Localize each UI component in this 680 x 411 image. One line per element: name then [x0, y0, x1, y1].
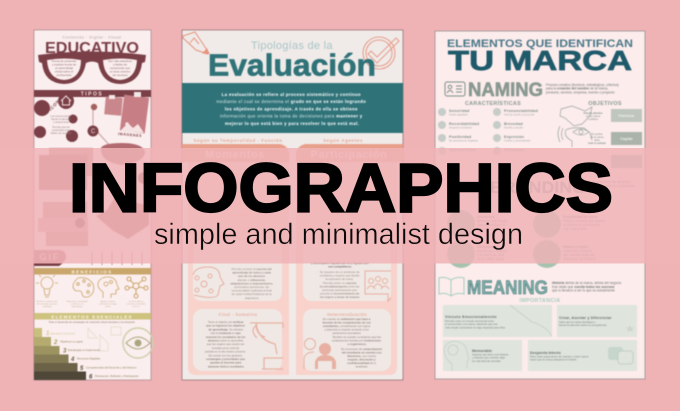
- heading: tu marca: TU MARCA: [448, 45, 632, 76]
- benefit texts: e interés en el: [70, 302, 84, 306]
- button: captar: [611, 132, 642, 145]
- pill: gif: [34, 250, 66, 266]
- step labels: 3: [63, 348, 67, 354]
- characteristics list: Recordabilidad: [449, 122, 480, 126]
- card: final sumativa: tras la instancia en que: [211, 331, 241, 335]
- meaning description: Historia detrás de la marca, detrás del negocio: [552, 281, 621, 285]
- step labels: Competencias del Docente y del Alumno: [86, 366, 137, 370]
- card: heteroevaluacion: confidencialidad de lo: [347, 361, 376, 365]
- step labels: 6: [89, 374, 93, 380]
- benefit texts: Ayuda a retener: [101, 300, 116, 303]
- timeline nodes: [88, 104, 112, 148]
- card: crear asentar diferenciar: Hace que la marca destaque y: [559, 320, 596, 324]
- title: educativo: EDUCATIVO: [45, 40, 139, 57]
- pill: gif: GIF: [40, 252, 60, 262]
- glasses right lens text: sin recursos: [112, 73, 128, 77]
- objective text: captar: todo lo activan: [588, 142, 606, 145]
- card: coevaluacion: la retroalimentación entre las: [320, 284, 359, 288]
- heading: importancia: IMPORTANCIA: [520, 298, 560, 304]
- card: heteroevaluacion: Es cuando se realización que hace a: [323, 317, 370, 321]
- card: formativa: [193, 240, 282, 301]
- branding items: todos los canales: [477, 227, 502, 231]
- glasses right lens text: Son más atractivos: [108, 59, 132, 63]
- card: heteroevaluacion: del estudiante en reunión con: [342, 350, 382, 354]
- characteristics list: Brevedad: [504, 122, 523, 126]
- band: beneficios: BENEFICIOS: [71, 269, 113, 274]
- heading: naming: NAMING: [468, 80, 543, 101]
- card: despierta interes: Despierta Interés: [530, 351, 561, 355]
- card: final sumativa: que les sugiere que puede ser: [207, 342, 244, 346]
- card: memorable: es más fácil de recordar: [472, 359, 501, 363]
- card: crear asentar diferenciar: [557, 305, 637, 337]
- panel: teal description: información que orienta la toma de decisiones para mantener y: [220, 114, 363, 119]
- branding items: Diferenciación: [477, 245, 499, 249]
- card: heteroevaluacion: directores, con mucho: [347, 354, 376, 358]
- glasses left lens text: profesorado: [57, 73, 72, 77]
- label: caracteristicas: CARACTERÍSTICAS: [465, 99, 521, 107]
- card: final sumativa: Final - Sumativa: [219, 312, 258, 317]
- benefit texts: Estimula la creatividad: [67, 300, 88, 303]
- panel: teal description: los objetivos de aprendizaje. A través de ella se obtiene: [225, 106, 358, 111]
- card: vinculo emocionalmente: el consumidor y la marca, haciendo que ese: [445, 322, 498, 326]
- bubble: mapa mental: [101, 143, 145, 165]
- subtitle: contenido digital visual: Contenido · Digital · Visual: [63, 36, 121, 40]
- card: coevaluacion: [303, 240, 391, 301]
- branding items: Valores y misión: [563, 245, 588, 249]
- card: despierta interes: Para crear seguimiento de marcas y crear marca: [530, 354, 589, 358]
- icon text: y reducir texto: [53, 121, 69, 124]
- button: captar: Captar: [620, 136, 633, 141]
- card: coevaluacion: la expresión de todos.: [325, 277, 354, 281]
- branding items: Rasgos humanos que definen: [563, 219, 606, 223]
- heading: tipologias de la: Tipologías de la: [251, 40, 333, 52]
- card: final sumativa: muestra los resultados de los: [206, 335, 246, 339]
- card: coevaluacion: y desempeño logrado por él y logrado por: [311, 261, 370, 265]
- branding items: de su mismo sector: [477, 257, 506, 261]
- step labels: 1: [46, 331, 50, 337]
- card: heteroevaluacion: u organismos.: [347, 342, 367, 346]
- card: heteroevaluacion: y aspectos a mejorar tomando a los: [324, 328, 369, 332]
- naming description: Proceso creativo (técnicos, estratégicos, criterios): [546, 83, 619, 87]
- step labels: Objetivos a Lograr: [60, 340, 83, 344]
- branding items: clara y constante en: [477, 223, 506, 227]
- column: participacion: [296, 144, 403, 375]
- icon: house circle: [58, 93, 74, 109]
- card: vinculo emocionalmente: más simple conectarse en algo especial para ellos: [445, 325, 506, 329]
- faint card text: Autoevaluación: [338, 172, 359, 176]
- benefit texts: complejos: [42, 306, 52, 308]
- card: final sumativa: ayudan al docente para: [210, 361, 242, 365]
- icon: small circles: [34, 114, 78, 142]
- card: crear asentar diferenciar: llamar la atención sobre la competencia: [559, 323, 607, 327]
- icon text: llamar la atención: [51, 118, 71, 121]
- icon: palette: [73, 278, 94, 297]
- button: hidden: [611, 155, 642, 168]
- faint mid boxes: [38, 148, 150, 246]
- figures row: [92, 252, 142, 265]
- card: formativa: aprendizaje de todos y cada: [232, 271, 271, 275]
- panel: elementos de marca: [435, 31, 645, 379]
- card: crear asentar diferenciar: Crear, Asentar y Diferenciar: [559, 316, 612, 320]
- icon: trophy: [250, 323, 283, 369]
- card: heteroevaluacion: respeto, discreción y: [348, 358, 376, 362]
- branding items: decisiones de la marca: [563, 257, 596, 261]
- label: objetivos: OBJETIVOS: [588, 101, 622, 107]
- card: coevaluacion: confianza y respeto que facilite: [320, 274, 360, 278]
- icon: meeting bubble: [365, 271, 391, 301]
- card: final sumativa: partida en el año lectivo próximo.: [205, 350, 246, 354]
- icon: people with book: [304, 338, 336, 369]
- icon: light bulb: [36, 275, 58, 297]
- title: infographics: INFOGRAPHICS: [69, 150, 613, 226]
- card: final sumativa: de aprendizaje. Se efectúa: [208, 327, 243, 331]
- card: coevaluacion: personas participantes que: [322, 288, 357, 292]
- icon: head: [98, 277, 119, 298]
- step labels: Estrategias a Implementar: [68, 348, 101, 352]
- card: final sumativa: Tiene el objetivo de verificar: [208, 320, 244, 324]
- branding items: Personalidad de marca: [563, 215, 598, 219]
- objective text: fidelizar: Vínculo afectivo: [583, 112, 603, 115]
- icon text: Permite que los: [52, 126, 70, 129]
- panel: teal description: La evaluación se refiere al proceso sistemático y continuo: [222, 92, 361, 97]
- card: coevaluacion: permite el reconocimiento de: [320, 292, 359, 296]
- step labels: 5: [80, 366, 84, 372]
- decor sheets: [88, 327, 121, 351]
- card: final sumativa: alcanzar dichos resultados: [208, 364, 244, 368]
- card: final sumativa: Sin contar con los gestores,: [208, 353, 243, 357]
- characteristics list: Expresión: [504, 135, 525, 139]
- band: elementos esenciales: [34, 313, 151, 320]
- label: agentes: Según Agentes: [323, 138, 363, 143]
- naming description: producto, servicio, empresa, evento o proyecto: [546, 90, 615, 94]
- card: formativa: asignatura.: [245, 296, 259, 300]
- icon: pencil: [183, 32, 209, 54]
- step labels: Recursos Digitales: [77, 356, 101, 360]
- characteristics list: Sin asociaciones negativas: [449, 140, 479, 142]
- step labels: 2: [53, 340, 58, 346]
- benefit texts: Conecta ideas y: [129, 300, 144, 303]
- card: heteroevaluacion: estudiantes, considerando sus logros: [323, 324, 370, 328]
- benefit texts: [36, 300, 146, 308]
- heading: evaluacion: Evaluación: [208, 48, 376, 82]
- card: heteroevaluacion: docente de las competencias de sus: [322, 320, 371, 324]
- objective text: captar: debe: [594, 139, 600, 142]
- icon: network: [125, 277, 148, 298]
- large note image: [120, 92, 149, 133]
- icon: glasses: [38, 52, 146, 84]
- card: formativa: de cada Unidad Didáctica de la: [232, 292, 272, 296]
- card: memorable: Memorable: [472, 349, 492, 353]
- label: imagenes: IMÁGENES: [118, 131, 142, 138]
- band: tipos: TIPOS: [81, 92, 103, 98]
- icon text: Los iconos pueden: [50, 115, 72, 118]
- benefit texts: relaciona contenidos: [126, 302, 146, 306]
- panel: teal description: mediante el cual se determina el grado en que se están logrando: [216, 99, 366, 104]
- step labels: 4: [70, 357, 75, 363]
- benefit texts: Facilita la comprensión: [36, 300, 58, 303]
- branding items: y de relacionarse: [563, 227, 588, 231]
- card: final sumativa: tomada como nivel de: [212, 346, 240, 350]
- icon: sound circle: [34, 100, 50, 116]
- glasses left lens text: virtual sobre el: [55, 70, 73, 74]
- small note image: [104, 95, 123, 116]
- card: final sumativa: alumnos sobre lo aprendido: [208, 338, 243, 342]
- band: beneficios: [34, 268, 151, 274]
- heading: meaning: MEANING: [467, 278, 548, 299]
- card: heteroevaluacion: Es el proceso de comprobación: [341, 347, 382, 351]
- card: memorable: Aspecto que tiene una historia: [472, 352, 509, 356]
- card: despierta interes: [528, 340, 637, 371]
- characteristics list: Asegurar recordación: [449, 126, 473, 130]
- translucent title band: [0, 148, 680, 264]
- benefit texts: entre sí: [133, 305, 140, 308]
- objective text: fidelizar: con la marca: [586, 115, 601, 118]
- branding items: Coherencia: [477, 215, 495, 219]
- icon: check circle: [363, 37, 399, 69]
- card: heteroevaluacion: analizado.: [356, 364, 369, 368]
- characteristics list: Fácil de escribir y pronunciar: [504, 114, 535, 116]
- icon: open book: [439, 277, 464, 296]
- benefit texts: plazo: [106, 306, 111, 308]
- card: formativa: curriculares pertinentes. Es: [234, 285, 270, 289]
- characteristics list: Pronunciabilidad: [504, 109, 538, 113]
- card: coevaluacion: Permite poner en marcha: [323, 281, 356, 285]
- panel: tipologias de la evaluacion: [182, 30, 403, 380]
- glasses left lens text: y explicar temas de: [52, 62, 76, 66]
- branding items: a la marca de otras: [477, 253, 505, 257]
- card: formativa: afectar, e influenciar,: [238, 278, 266, 282]
- icon: handshake: [560, 106, 592, 126]
- card: vinculo emocionalmente: [443, 305, 552, 337]
- card: heteroevaluacion: [303, 309, 391, 371]
- panel: teal description: mejorar lo que está bien y para resolver lo que está mal.: [225, 121, 359, 126]
- glasses left lens text: un aprendizaje: [55, 66, 74, 70]
- characteristics list: Sencillo y sencillo: [504, 126, 524, 130]
- meaning description: que lo llevaron a ser lo que es actualmente: [552, 289, 615, 293]
- step labels: [46, 331, 139, 380]
- column: momentos: [182, 144, 289, 375]
- icon: id card: [445, 82, 465, 96]
- faint card text: Diagnóstica - Inicial: [222, 172, 248, 176]
- characteristics list: [438, 108, 538, 155]
- characteristics list: Positividad: [449, 135, 472, 139]
- benefit texts: de conceptos y temas: [37, 302, 57, 306]
- card: memorable: [443, 340, 522, 371]
- button: fidelizar: Fidelizar: [618, 113, 635, 118]
- card: final sumativa: que se lograron los objetivos: [206, 324, 245, 328]
- card: formativa: adaptaciones y mejoramientos: [230, 281, 273, 285]
- faint card text: Procesual - Formativa: [220, 213, 250, 217]
- characteristics list: Creativo y personalizado: [504, 140, 531, 142]
- benefit texts: información a largo: [99, 302, 118, 306]
- branding description: posicionamiento y reputación: [592, 184, 635, 188]
- staircase: [34, 328, 86, 380]
- objective text: fidelizar: y público: [588, 118, 599, 121]
- faint card text: Coevaluación: [339, 213, 357, 217]
- column: momentos: Momentos: [205, 149, 265, 161]
- glasses right lens text: comprender que: [110, 66, 131, 70]
- faint card text: [220, 172, 359, 217]
- glasses left lens text: Forma de presentar: [52, 59, 76, 63]
- label: temporalidad: Según su Temporalidad - Función: [193, 138, 283, 143]
- column: participacion: Participación: [311, 149, 387, 161]
- card: vinculo emocionalmente: Permite crear un vínculo emocional entre: [445, 319, 495, 323]
- card: coevaluacion: sus compañeros.: [328, 264, 352, 268]
- card: heteroevaluacion: evaluaciones hechas por instituciones: [332, 338, 381, 342]
- button: fidelizar: [611, 109, 642, 122]
- glasses right lens text: y fáciles de: [113, 62, 127, 66]
- branding description: Construcción de identidad,: [592, 180, 631, 184]
- meaning description: Ese relato que cuenta todos los sucesos: [552, 285, 614, 289]
- icon: eye: [123, 328, 153, 358]
- icon text: fáciles de recordar: [51, 132, 71, 135]
- icon: head network: [193, 267, 224, 298]
- card: despierta interes: hacer que la marca despierte el interés: [530, 358, 577, 362]
- panel: educational infographic: [34, 30, 153, 380]
- band: tipos: [34, 90, 151, 98]
- branding circles: [447, 210, 561, 268]
- card: heteroevaluacion: parámetros acordados.: [333, 331, 362, 335]
- characteristics list: Sonido agradable: [449, 114, 468, 116]
- panel: teal description: [182, 83, 403, 133]
- branding items: la manera de comunicarse: [563, 223, 601, 227]
- elements subtitle: Para el desarrollo de estrategias de contenido visual educativo y la educación: [49, 321, 136, 324]
- card: final sumativa: estrategias y prioridades que: [206, 357, 245, 361]
- card: formativa: Permite conocer la marcha del: [232, 267, 272, 271]
- icon: eye head: [558, 126, 592, 147]
- card: memorable: y relación que cuenten algo: [472, 356, 505, 360]
- card: formativa: recomendable realizarla al final: [232, 289, 272, 293]
- card: heteroevaluacion: Heteroevaluación: [327, 312, 367, 317]
- benefit texts: aprendizaje: [72, 305, 83, 308]
- branding items: Creencias y motivos: [563, 249, 592, 253]
- card: coevaluacion: los logros y áreas de mejora.: [320, 295, 360, 299]
- branding description: de la marca: [592, 188, 609, 192]
- characteristics list: Afinidades: [504, 148, 525, 152]
- characteristics list: Sonoridad: [449, 109, 470, 113]
- branding items: [477, 215, 606, 261]
- characteristics list: Aplicabilidad: [449, 148, 476, 152]
- card: final sumativa: [193, 309, 282, 371]
- band: elementos esenciales: ELEMENTOS ESENCIALES: [51, 314, 133, 319]
- branding heading: BRANDING: [490, 178, 586, 197]
- heading: elementos que identifican: ELEMENTOS QUE IDENTIFICAN: [447, 38, 633, 50]
- branding items: Mantener una imagen: [477, 219, 508, 223]
- label: iconos: ICONOS: [48, 93, 66, 112]
- step labels: Narrativa Coherente: [50, 332, 76, 336]
- icon text: contenidos sean: [52, 129, 71, 132]
- naming description: para la creación del nombre de la marca,: [546, 87, 608, 91]
- branding items: Aquello que distingue: [477, 249, 508, 253]
- glasses right lens text: un texto extenso: [110, 70, 131, 74]
- timeline nodes: C: [91, 129, 96, 135]
- card: heteroevaluacion: También se pueden considerar aquí las: [332, 335, 382, 339]
- step labels: Retroacción, Reflexión y Participación: [95, 374, 139, 378]
- objective text: captar: de la marca: [590, 136, 604, 139]
- subtitle: simple and minimalist design: simple and minimalist design: [154, 218, 523, 251]
- card: vinculo emocionalmente: Vínculo Emocionalmente: [445, 314, 498, 319]
- card: coevaluacion: Se requiere de un ambiente de: [320, 270, 360, 274]
- objective text: captar: El nombre: [591, 133, 603, 136]
- branding items: que orientan todas las: [563, 253, 595, 257]
- card: formativa: uno de los alumnos: [238, 274, 266, 278]
